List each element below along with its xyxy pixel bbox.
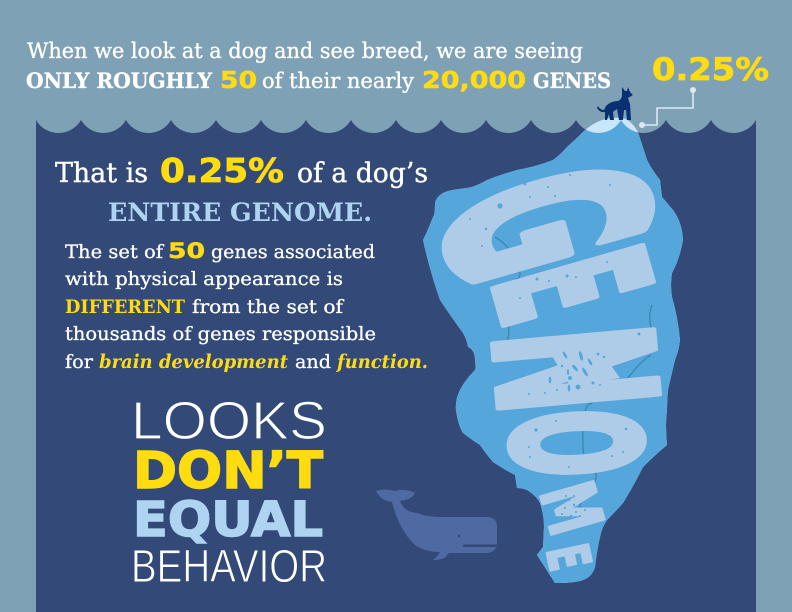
headline: that is 0.25% (55, 151, 428, 227)
icon: whale (376, 490, 497, 560)
N diagonal block (552, 350, 620, 386)
iceberg tip above water (423, 118, 683, 583)
iceberg (423, 118, 683, 583)
body text: with physical appearance is (65, 268, 343, 290)
heading: intro text: of their nearly (262, 69, 414, 93)
body text (65, 239, 428, 373)
body text: genes associated (211, 241, 375, 263)
heading: intro text: 50 (220, 68, 257, 94)
title: looks don't equal behavior (131, 391, 327, 592)
heading: intro text: ONLY ROUGHLY (26, 68, 213, 93)
body text: 50 (168, 239, 205, 263)
body text: The set of (65, 241, 165, 263)
headline: that is 0.25%: That is (55, 158, 148, 189)
heading: intro text: When we look at a dog and see breed, we are seeing (27, 39, 583, 63)
body text: DIFFERENT (65, 296, 185, 318)
word: GENOME: E (532, 538, 603, 576)
panel: ocean (36, 120, 756, 612)
headline: that is 0.25%: 0.25% (160, 151, 284, 190)
heading: intro text: GENES (533, 68, 611, 93)
word: GENOME: E (444, 227, 693, 345)
body text: thousands of genes responsible (65, 323, 376, 345)
word: GENOME: G (376, 136, 706, 311)
callout: 0.25%: 0.25% (652, 52, 769, 88)
iceberg body under water (423, 118, 683, 583)
title: looks don't equal behavior: EQUAL (133, 492, 323, 548)
body text: and (295, 351, 331, 373)
speckles (469, 174, 640, 517)
title: looks don't equal behavior: DON’T (133, 442, 323, 501)
heading: intro text: 20,000 (422, 68, 526, 94)
word: GENOME: O (471, 405, 674, 482)
body text: from the set of (192, 296, 345, 318)
headline: that is 0.25%: ENTIRE GENOME. (108, 198, 372, 227)
title: looks don't equal behavior: LOOKS (131, 391, 327, 451)
body text: function. (335, 351, 428, 373)
heading: intro text (26, 39, 611, 94)
body text: for (65, 351, 94, 373)
body text: brain development (99, 351, 288, 373)
title: looks don't equal behavior: BEHAVIOR (131, 540, 327, 592)
headline: that is 0.25%: of a dog’s (297, 158, 428, 189)
word: GENOME (376, 136, 706, 576)
word: GENOME: N (440, 316, 702, 423)
icon: dog (597, 87, 633, 120)
word: GENOME: M (521, 472, 620, 545)
connector line (639, 87, 696, 128)
cracks (495, 237, 652, 508)
